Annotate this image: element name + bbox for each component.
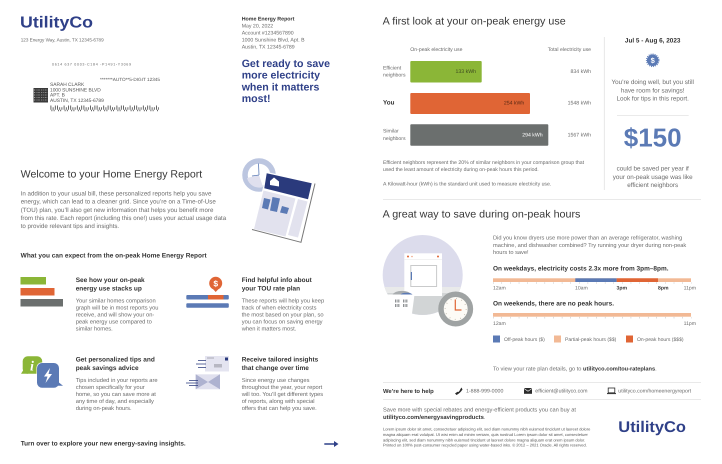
- icon: dollar pin and rate bars: $: [213, 278, 218, 288]
- welcome paragraph: In addition to your usual bill, these personalized reports help you save: [21, 190, 212, 198]
- weekday heading: On weekdays, electricity costs 2.3x more from 3pm–8pm.: [493, 266, 669, 273]
- recipient address: APT. B: [50, 93, 65, 99]
- intro text: machine, and dishwasher combined? Try running your dryer during non-peak: [493, 242, 686, 249]
- report info: May 20, 2022: [242, 24, 273, 30]
- weekday timeline: [493, 278, 696, 292]
- row: similar neighbors: 294 kWh: [522, 132, 543, 138]
- icon: email: [524, 388, 532, 394]
- icon: dollar badge: [646, 54, 659, 67]
- intro text: hours to save!: [493, 249, 529, 256]
- weekend timeline: 11pm: [684, 321, 696, 327]
- weekend timeline: [493, 313, 696, 327]
- offer text: .: [484, 415, 486, 421]
- weekday timeline: 11pm: [684, 286, 696, 292]
- encouragement: Look for tips in this report.: [616, 96, 689, 103]
- text: your TOU rate plan: [242, 285, 300, 292]
- weekday timeline: 3pm: [616, 286, 627, 292]
- text: during on-peak hours.: [76, 405, 132, 412]
- weekend timeline: 12am: [493, 321, 506, 327]
- legal text: Printed on 100% post-consumer recycled paper using water-based inks. © 2012 – 2021 Oracle. All rights reserved.: [383, 443, 587, 448]
- logo: UtilityCo footer: UtilityCo: [618, 419, 686, 436]
- icon: QR code: [34, 88, 48, 102]
- panel: first look: [383, 16, 591, 188]
- illustration: clock and report: [245, 161, 315, 242]
- welcome paragraph: energy, which can lead to a cleaner grid. Since you’re on a Time-of-Use: [21, 199, 216, 206]
- email address: efficient@utilityco.com: [535, 389, 588, 395]
- legal text: adipiscing elit, sed diam nonummy nibh euismod tincidunt ut laoreet dolore magna aliquam erat orem ipsum dolor.: [383, 438, 585, 442]
- phone number: 1-888-999-0000: [466, 389, 503, 395]
- logo: UtilityCo: UtilityCo: [20, 15, 93, 32]
- heading: what to expect: What you can expect from the on-peak Home Energy Report: [21, 253, 208, 260]
- offer text: Save more with special rebates and energy-efficient products you can buy at: [383, 406, 576, 413]
- legend: Partial-peak hours ($$): [565, 337, 617, 343]
- text: These reports will help you keep: [242, 298, 324, 304]
- icon: dollar badge: $: [651, 56, 656, 65]
- savings note: efficient neighbors: [627, 182, 678, 189]
- mail codes: 0614 637 0003-C184 -P1491-Y3069: [52, 62, 131, 66]
- recipient address: 1000 SUNSHINE BLVD: [50, 88, 101, 94]
- column headers: On-peak electricity use: [410, 47, 463, 53]
- text: chosen specifically for your: [76, 384, 145, 391]
- offer text: utilityco.com/energysavingproducts: [383, 414, 485, 421]
- welcome paragraph: to provide relevant tips and insights.: [21, 223, 119, 230]
- panel: offers and legal: [383, 406, 686, 448]
- legal text: Lorem ipsum dolor sit amet, consectetuer adipiscing elit, sed diam nonummy nibh euismod tincidunt ut laoreet dolore: [383, 427, 591, 432]
- text: you can focus on saving energy: [242, 318, 323, 326]
- panel: on-peak savings: [383, 209, 696, 372]
- legend: [493, 336, 684, 343]
- row: efficient neighbors: [383, 61, 591, 82]
- feature: TOU rate plan: [186, 277, 324, 332]
- icon: envelopes: [186, 356, 229, 389]
- row: you: You: [383, 100, 395, 107]
- text: Tips included in your reports are: [76, 377, 158, 384]
- tagline: more electricity: [242, 70, 320, 82]
- row: similar neighbors: [383, 124, 591, 146]
- row: efficient neighbors: 834 kWh: [571, 69, 591, 75]
- rate plan link: To view your rate plan details, go to utilityco.com/tou-rateplans.: [493, 365, 657, 372]
- heading: first look: A first look at your on-peak energy use: [383, 16, 566, 28]
- weekday timeline: 10am: [575, 286, 588, 292]
- row: you: [383, 93, 591, 114]
- footer prompt: Turn over to explore your new energy-saving insights.: [21, 440, 186, 447]
- text: Receive tailored insights: [242, 356, 319, 364]
- heading: great way to save: A great way to save during on-peak hours: [383, 209, 580, 221]
- website: utilityco.com/homeenergyreport: [618, 389, 692, 395]
- text: home, so you can save more at: [76, 391, 156, 398]
- row: efficient neighbors: Efficient: [383, 65, 402, 71]
- text: peak savings advice: [76, 365, 139, 372]
- text: Since energy use changes: [242, 377, 310, 384]
- text: will too. You’ll get different types: [241, 391, 323, 398]
- row: similar neighbors: 1567 kWh: [568, 132, 591, 138]
- recipient address: SARAH CLARK: [50, 82, 85, 88]
- bar chart: on-peak use: [383, 47, 591, 146]
- text: similar homes.: [76, 326, 113, 332]
- text: throughout the year, your report: [242, 384, 323, 391]
- encouragement: You’re doing well, but you still: [612, 79, 694, 86]
- tagline: Get ready to save: [242, 58, 330, 70]
- text: See how your on-peak: [76, 277, 145, 284]
- legal text: magna aliquam erat volutpat. Ut wisi enim ad minim veniam, quis nostrud Lorem ipsum dolor sit amet, consectetuer: [383, 432, 589, 437]
- savings figure: $150: [624, 122, 682, 152]
- text: any time of day, and especially: [76, 398, 154, 405]
- presort line: *******AUTO**5-DIGIT 12345: [100, 77, 160, 82]
- row: efficient neighbors: neighbors: [383, 73, 406, 79]
- panel: report details: [241, 17, 330, 105]
- text: graph will be in most reports you: [76, 304, 158, 312]
- welcome paragraph: from this rate. Each report (including this one!) uses your actual usage data: [21, 215, 227, 222]
- contact heading: We’re here to help: [383, 388, 434, 395]
- tagline: when it matters: [241, 81, 320, 93]
- report info: Austin, TX 12345-6789: [242, 45, 295, 51]
- icon: comparison bars: [20, 277, 63, 306]
- savings note: your on-peak usage was like: [613, 174, 693, 181]
- icon: laptop: [607, 388, 616, 394]
- welcome paragraph: (TOU) plan, you’ll also get new information that helps you benefit more: [21, 207, 214, 214]
- icon: chat bubbles: i: [30, 360, 34, 374]
- text: receive, and will show your on-: [76, 312, 154, 318]
- panel: welcome: [21, 169, 227, 230]
- text: offers that can help you save.: [242, 405, 317, 412]
- text: peak energy use compared to: [76, 318, 152, 326]
- row: efficient neighbors: 133 kWh: [456, 69, 476, 75]
- row: you: 254 kWh: [504, 101, 524, 107]
- encouragement: have room for savings!: [621, 87, 685, 94]
- text: Your similar homes comparison: [76, 298, 156, 304]
- row: similar neighbors: neighbors: [383, 136, 406, 142]
- text: track of when electricity costs: [242, 304, 317, 312]
- report info: Home Energy Report: [242, 17, 295, 23]
- legend: Off-peak hours ($): [504, 337, 545, 343]
- return address: 123 Energy Way, Austin, TX 12345-6789: [21, 38, 104, 43]
- barcode: [50, 106, 159, 110]
- panel: savings summary: [612, 37, 694, 189]
- text: Find helpful info about: [242, 277, 313, 284]
- text: of reports, along with special: [242, 398, 315, 405]
- weekday timeline: 12am: [493, 286, 506, 292]
- legend: On-peak hours ($$$): [637, 337, 684, 343]
- feature: energy use stacks up: [20, 277, 158, 332]
- report info: Account #1234567890: [242, 31, 294, 37]
- text: that change over time: [242, 365, 309, 372]
- panel: mailing header: [20, 15, 160, 111]
- row: you: 1548 kWh: [568, 101, 591, 107]
- column headers: [410, 47, 591, 53]
- arrow: [324, 441, 338, 447]
- chart notes: used the least amount of electricity during on-peak hours this period.: [383, 167, 539, 173]
- intro text: Did you know dryers use more power than an average refrigerator, washing: [493, 234, 682, 242]
- text: when it matters most.: [241, 326, 297, 332]
- date range: Jul 5 - Aug 6, 2023: [625, 37, 681, 44]
- icon: phone: [455, 388, 462, 395]
- panel: contact: [383, 388, 692, 395]
- illustration: dryer and clock: [383, 235, 470, 324]
- feature: tailored insights: [186, 356, 323, 412]
- weekday timeline: 8pm: [658, 286, 669, 292]
- column headers: Total electricity use: [548, 47, 591, 53]
- weekend heading: On weekends, there are no peak hours.: [493, 300, 614, 308]
- report info: 1000 Sunshine Blvd, Apt. B: [242, 38, 305, 44]
- row: similar neighbors: Similar: [383, 129, 399, 135]
- text: energy use stacks up: [76, 285, 142, 292]
- chart notes: A Kilowatt-hour (kWh) is the standard unit used to measure electricity use.: [383, 182, 551, 188]
- text: the most based on your plan, so: [242, 312, 324, 318]
- chart notes: Efficient neighbors represent the 20% of similar neighbors in your comparison group that: [383, 160, 585, 166]
- feature: personalized tips: [21, 356, 158, 412]
- recipient address: AUSTIN, TX 12345-6789: [50, 98, 104, 104]
- tagline: most!: [242, 93, 271, 105]
- text: Get personalized tips and: [76, 356, 155, 364]
- savings note: could be saved per year if: [617, 166, 689, 172]
- heading: welcome: Welcome to your Home Energy Report: [21, 169, 202, 181]
